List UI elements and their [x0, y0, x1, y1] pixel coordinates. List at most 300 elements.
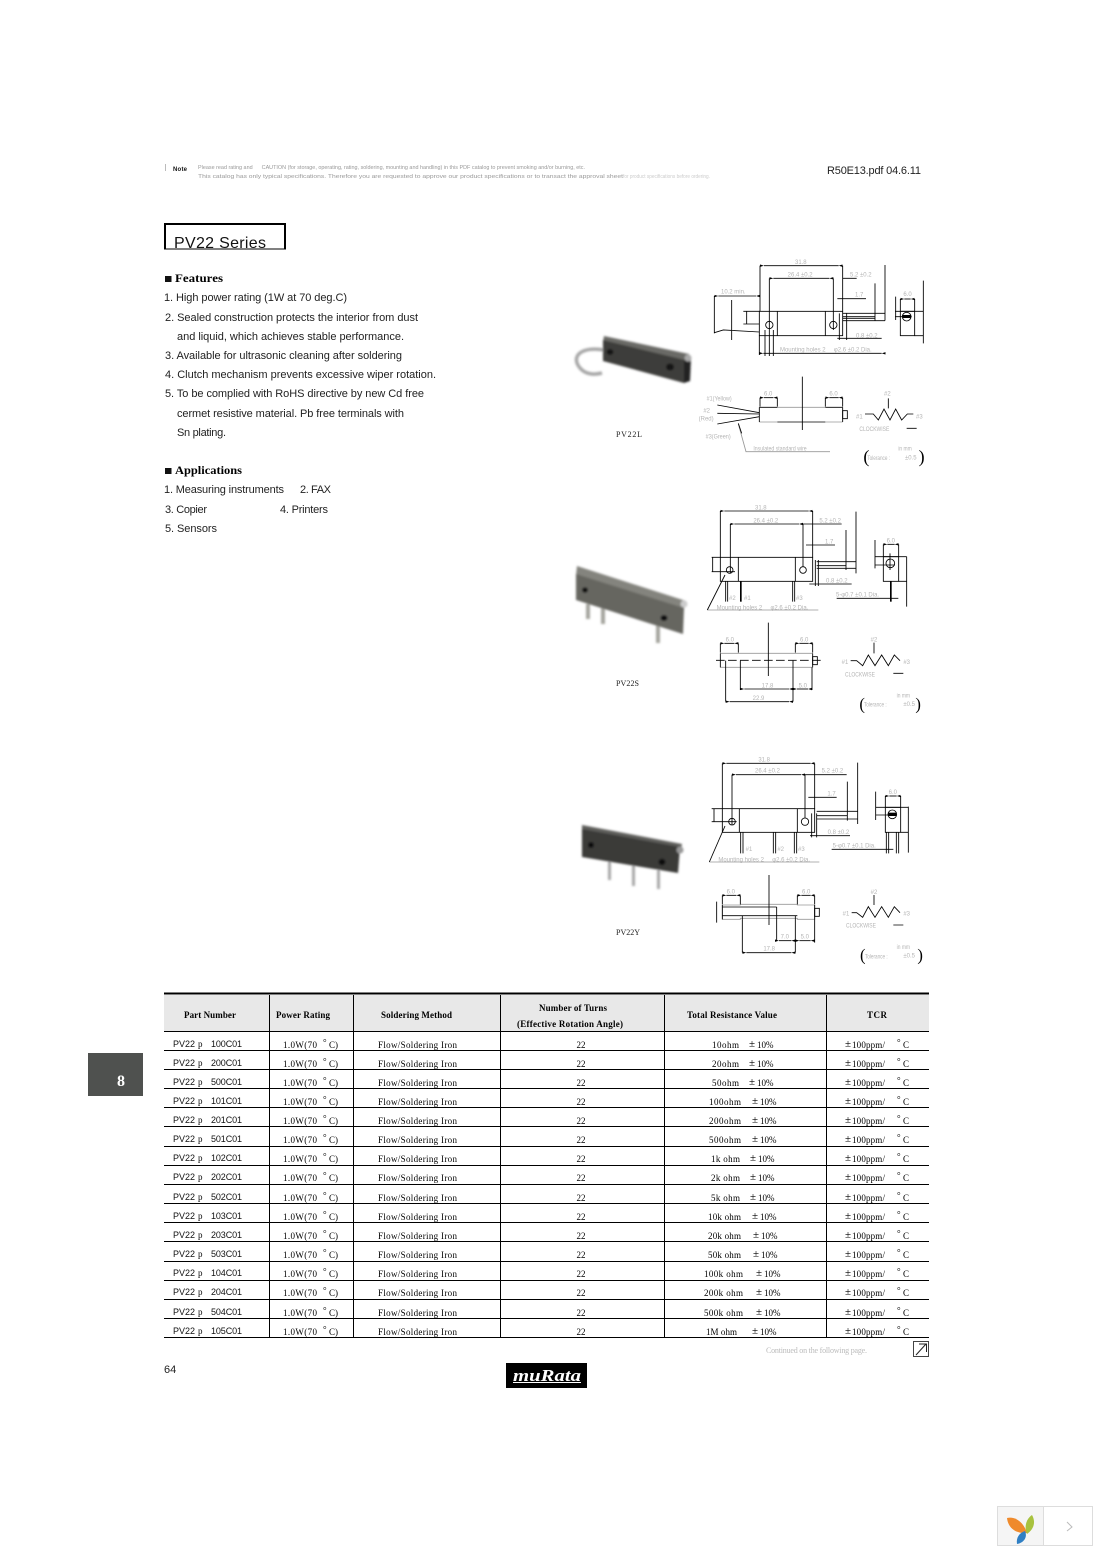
row 203C01: 20k ohm — [708, 1231, 741, 1241]
dimension drawing: PV22Y: CLOCKWISE — [846, 924, 876, 930]
dimension drawing: PV22S: 5.2 ±0.2 — [819, 519, 842, 525]
row 500C01: ± — [749, 1076, 755, 1088]
row 503C01: 503C01 — [211, 1249, 242, 1259]
row 100C01: 10% — [757, 1040, 774, 1050]
row 504C01: 500k ohm — [704, 1308, 743, 1318]
row 102C01: 22 — [576, 1154, 586, 1164]
row 103C01: ± — [752, 1210, 758, 1222]
row 100C01: 100C01 — [211, 1039, 242, 1049]
row 204C01 — [173, 1286, 909, 1298]
row 103C01: Flow/Soldering Iron — [378, 1212, 458, 1222]
row 105C01: Flow/Soldering Iron — [378, 1327, 458, 1337]
row 104C01: p — [198, 1268, 203, 1278]
row 105C01: 1M ohm — [706, 1327, 737, 1337]
dimension drawing: PV22L: in mm — [898, 447, 912, 453]
row 501C01: 10% — [760, 1135, 777, 1145]
applications list: Applications — [175, 463, 242, 477]
dimension drawing: PV22Y: 6.0 — [889, 790, 898, 796]
row 101C01 — [173, 1094, 909, 1107]
features list: Sn plating. — [177, 427, 226, 439]
row 503C01: PV22 — [173, 1249, 195, 1259]
row 502C01: 502C01 — [211, 1192, 242, 1202]
features list: 4. Clutch mechanism prevents excessive wiper rotation. — [165, 369, 436, 381]
row 202C01: 2k ohm — [711, 1173, 740, 1183]
row 501C01: ° — [323, 1132, 327, 1142]
row 203C01: 1.0W(70 — [283, 1231, 318, 1241]
dimension drawing: PV22Y: ) — [917, 946, 923, 965]
row 100C01: p — [198, 1039, 203, 1049]
row 503C01: C — [903, 1250, 909, 1260]
features list: 1. High power rating (1W at 70 deg.C) — [164, 292, 347, 304]
row 500C01: 500C01 — [211, 1077, 242, 1087]
features list: Features — [175, 271, 223, 285]
row 101C01: ° — [323, 1094, 327, 1104]
row 102C01: 1k ohm — [711, 1154, 740, 1164]
caption: PV22L: PV22L — [616, 430, 642, 439]
dimension drawing: PV22S: 1.7 — [825, 539, 834, 545]
row 204C01: C — [903, 1288, 909, 1298]
row 501C01: 22 — [576, 1135, 586, 1145]
dimension drawing: PV22Y — [709, 758, 923, 965]
row 201C01: Flow/Soldering Iron — [378, 1116, 458, 1126]
features list: and liquid, which achieves stable performance. — [177, 331, 404, 343]
dimension drawing: PV22S: 17.8 — [762, 683, 774, 689]
row 100C01: ± — [749, 1038, 755, 1050]
dimension drawing: PV22S: 31.8 — [755, 505, 767, 511]
row 203C01: ± — [753, 1229, 759, 1241]
applications list: 2. FAX — [300, 484, 332, 496]
row 101C01: Flow/Soldering Iron — [378, 1097, 458, 1107]
row 504C01: 100ppm/ — [852, 1308, 885, 1318]
row 202C01: ° — [323, 1170, 327, 1180]
dimension drawing: PV22L: Mounting holes 2 φ2.6 ±0.2 Dia. — [780, 348, 872, 354]
caption: PV22Y: PV22Y — [616, 928, 640, 937]
dimension drawing: PV22L: 31.8 — [795, 260, 807, 266]
row 504C01: ° — [897, 1306, 901, 1316]
applications list: 5. Sensors — [165, 523, 218, 535]
row 504C01: ± — [756, 1306, 762, 1318]
features list: 2. Sealed construction protects the interior from dust — [165, 312, 418, 324]
row 101C01: 1.0W(70 — [283, 1097, 318, 1107]
row 202C01: ± — [845, 1171, 851, 1183]
dimension drawing: PV22S: 22.9 — [753, 696, 765, 702]
dimension drawing: PV22L: 6.0 — [903, 292, 912, 298]
dimension drawing: PV22Y: #3 — [903, 911, 911, 917]
row 103C01: ° — [897, 1210, 901, 1220]
table header: TCR — [867, 1010, 888, 1020]
row 105C01: C) — [329, 1327, 338, 1337]
row 102C01: C — [903, 1154, 909, 1164]
row 203C01: C — [903, 1231, 909, 1241]
row 203C01: ° — [323, 1228, 327, 1238]
dimension drawing: PV22S: #2 — [871, 637, 878, 643]
row 105C01: ± — [845, 1325, 851, 1337]
row 102C01: p — [198, 1153, 203, 1163]
row 502C01: ° — [323, 1190, 327, 1200]
row 503C01: 10% — [761, 1250, 778, 1260]
row 200C01: C — [903, 1059, 909, 1069]
row 103C01: 22 — [576, 1212, 586, 1222]
section tab: 8: 8 — [117, 1073, 125, 1090]
row 105C01: 10% — [760, 1327, 777, 1337]
features list: 3. Available for ultrasonic cleaning after soldering — [165, 350, 402, 362]
dimension drawing: PV22L: ( — [863, 447, 869, 468]
dimension drawing: PV22Y: 0.8 ±0.2 — [828, 830, 850, 836]
row 103C01 — [173, 1210, 909, 1222]
row 504C01: ° — [323, 1306, 327, 1316]
row 503C01: ± — [753, 1248, 759, 1260]
dimension drawing: PV22Y: 26.4 ±0.2 — [755, 769, 781, 775]
logo: muRata: muRata — [513, 1366, 582, 1385]
row 501C01: 100ppm/ — [852, 1135, 885, 1145]
dimension drawing: PV22S: 6.0 — [726, 637, 735, 643]
dimension drawing: PV22S: #1 — [744, 596, 751, 602]
row 201C01: 10% — [760, 1116, 777, 1126]
row 204C01: 1.0W(70 — [283, 1288, 318, 1298]
row 504C01: 10% — [764, 1308, 781, 1318]
row 102C01: ± — [750, 1152, 756, 1164]
viewer widget — [998, 1506, 1092, 1546]
row 200C01: Flow/Soldering Iron — [378, 1059, 458, 1069]
note header: Please read rating and CAUTION (for storage, operating, rating, soldering, mounting and handling) in this PDF catalog to prevent smoking and/or burning, etc. — [198, 165, 585, 171]
row 101C01: 10% — [760, 1097, 777, 1107]
row 202C01: 22 — [576, 1173, 586, 1183]
row 105C01: C — [903, 1327, 909, 1337]
dimension drawing: PV22L: Insulated standard wire — [753, 446, 807, 452]
dimension drawing: PV22S: ( — [859, 694, 865, 713]
row 501C01: 1.0W(70 — [283, 1135, 318, 1145]
row 105C01: 1.0W(70 — [283, 1327, 318, 1337]
row 503C01: 50k ohm — [708, 1250, 741, 1260]
dimension drawing: PV22Y: Tolerance : — [865, 954, 888, 960]
row 100C01: ° — [897, 1038, 901, 1048]
row 503C01 — [173, 1248, 909, 1260]
row 105C01: 105C01 — [211, 1326, 242, 1336]
icon: continuation arrow — [914, 1342, 928, 1356]
row 200C01: C) — [329, 1059, 338, 1069]
dimension drawing: PV22L: #1(Yellow) — [707, 397, 732, 403]
dimension drawing: PV22Y: 6.0 — [802, 889, 811, 895]
applications list: 3. Copier — [165, 504, 207, 516]
row 503C01: ± — [845, 1248, 851, 1260]
dimension drawing: PV22S: 26.4 ±0.2 — [753, 519, 779, 525]
row 200C01: PV22 — [173, 1058, 195, 1068]
note header: Note — [173, 167, 188, 173]
row 103C01: p — [198, 1211, 203, 1221]
dimension drawing: PV22S: 0.8 ±0.2 — [826, 579, 848, 585]
row 502C01: 1.0W(70 — [283, 1193, 318, 1203]
row 104C01: 1.0W(70 — [283, 1269, 318, 1279]
row 200C01: 22 — [576, 1059, 586, 1069]
dimension drawing: PV22L: #2 — [703, 409, 711, 415]
table header: (Effective Rotation Angle) — [517, 1019, 623, 1029]
row 504C01: PV22 — [173, 1307, 195, 1317]
dimension drawing: PV22S: #2 — [729, 596, 736, 602]
row 503C01: 1.0W(70 — [283, 1250, 318, 1260]
product photo: PV22Y — [582, 825, 684, 889]
row 503C01: 100ppm/ — [852, 1250, 885, 1260]
row 204C01: Flow/Soldering Iron — [378, 1288, 458, 1298]
row 200C01: 100ppm/ — [852, 1059, 885, 1069]
row 103C01: PV22 — [173, 1211, 195, 1221]
row 100C01: 1.0W(70 — [283, 1040, 318, 1050]
dimension drawing: PV22Y: #2 — [871, 890, 878, 896]
applications list: 4. Printers — [280, 504, 328, 516]
row 104C01: ° — [323, 1266, 327, 1276]
icon: green leaf — [1026, 1515, 1034, 1534]
product photo: PV22L — [576, 336, 692, 383]
row 200C01: ± — [749, 1057, 755, 1069]
row 201C01: p — [198, 1115, 203, 1125]
dimension drawing: PV22S: CLOCKWISE — [845, 673, 875, 679]
row 503C01: p — [198, 1249, 203, 1259]
row 500C01: PV22 — [173, 1077, 195, 1087]
dimension drawing: PV22Y: ( — [860, 946, 866, 965]
row 103C01: ° — [323, 1210, 327, 1220]
row 104C01: 100ppm/ — [852, 1269, 885, 1279]
dimension drawing: PV22Y: #1 — [746, 847, 753, 853]
dimension drawing: PV22L: #3 — [916, 414, 923, 420]
dimension drawing: PV22L: CLOCKWISE — [859, 427, 889, 433]
row 100C01: 10ohm — [712, 1040, 739, 1050]
row 100C01: C — [903, 1040, 909, 1050]
row 102C01: 102C01 — [211, 1153, 242, 1163]
row 204C01: ± — [756, 1286, 762, 1298]
row 501C01: 500ohm — [709, 1135, 741, 1145]
dimension drawing: PV22Y: 7.0 — [781, 935, 790, 941]
dimension drawing: PV22S: Mounting holes 2 φ2.6 ±0.2 Dia. — [717, 605, 809, 611]
row 203C01: 100ppm/ — [852, 1231, 885, 1241]
row 504C01: C — [903, 1308, 909, 1318]
table: part numbers — [164, 992, 929, 1338]
row 500C01: 10% — [757, 1078, 774, 1088]
row 201C01 — [173, 1114, 909, 1126]
row 503C01: Flow/Soldering Iron — [378, 1250, 458, 1260]
row 501C01: p — [198, 1134, 203, 1144]
row 500C01: p — [198, 1077, 203, 1087]
row 103C01: 10% — [760, 1212, 777, 1222]
row 200C01: 20ohm — [712, 1059, 739, 1069]
dimension drawing: PV22S: #3 — [796, 596, 803, 602]
dimension drawing: PV22Y: Mounting holes 2 φ2.6 ±0.2 Dia. — [718, 857, 810, 863]
row 202C01: p — [198, 1172, 203, 1182]
row 204C01: ° — [897, 1286, 901, 1296]
row 200C01: p — [198, 1058, 203, 1068]
dimension drawing: PV22Y: ±0.5 — [903, 953, 916, 959]
row 203C01: 203C01 — [211, 1230, 242, 1240]
row 102C01: 10% — [758, 1154, 775, 1164]
row 104C01: ° — [897, 1266, 901, 1276]
row 103C01: C — [903, 1212, 909, 1222]
dimension drawing: PV22Y: 6.0 — [727, 889, 736, 895]
row 101C01: 100ohm — [709, 1097, 741, 1107]
dimension drawing: PV22Y: 31.8 — [758, 758, 771, 764]
table header: Power Rating — [276, 1010, 330, 1020]
table grid — [164, 995, 929, 1338]
row 500C01: ± — [845, 1076, 851, 1088]
features list: cermet resistive material. Pb free terminals with — [177, 408, 404, 420]
dimension drawing: PV22L: ) — [919, 447, 925, 468]
row 101C01: 22 — [576, 1097, 586, 1107]
row 502C01: 100ppm/ — [852, 1193, 885, 1203]
row 101C01: ± — [845, 1095, 851, 1107]
row 503C01: 22 — [576, 1250, 586, 1260]
row 105C01: ± — [752, 1325, 758, 1337]
row 102C01: C) — [329, 1154, 338, 1164]
row 501C01: PV22 — [173, 1134, 195, 1144]
row 204C01: 100ppm/ — [852, 1288, 885, 1298]
row 202C01: Flow/Soldering Iron — [378, 1173, 458, 1183]
row 101C01: ° — [897, 1094, 901, 1104]
row 501C01: ± — [845, 1133, 851, 1145]
row 105C01: 100ppm/ — [852, 1327, 885, 1337]
row 102C01: ° — [323, 1152, 327, 1162]
row 105C01 — [173, 1324, 909, 1337]
applications list — [164, 463, 332, 535]
row 100C01: PV22 — [173, 1039, 195, 1049]
row 103C01: ± — [845, 1210, 851, 1222]
row 200C01: 10% — [757, 1059, 774, 1069]
row 204C01: 10% — [764, 1288, 781, 1298]
dimension drawing: PV22L: 1.7 — [855, 293, 864, 299]
row 103C01: 10k ohm — [708, 1212, 741, 1222]
dimension drawing: PV22L: ±0.5 — [905, 455, 917, 461]
features list: 5. To be complied with RoHS directive by new Cd free — [165, 388, 424, 400]
row 204C01: PV22 — [173, 1287, 195, 1297]
row 201C01: C — [903, 1116, 909, 1126]
row 501C01: C — [903, 1135, 909, 1145]
row 105C01: ° — [897, 1324, 901, 1334]
row 500C01: ° — [897, 1076, 901, 1086]
dimension drawing: PV22L: 0.8 ±0.2 — [856, 333, 878, 339]
row 502C01: ± — [845, 1191, 851, 1203]
row 500C01 — [173, 1076, 909, 1088]
row 202C01: C) — [329, 1173, 338, 1183]
dimension drawing: PV22S: 6.0 — [800, 637, 809, 643]
row 101C01: ± — [752, 1095, 758, 1107]
row 500C01: C) — [329, 1078, 338, 1088]
row 203C01 — [173, 1228, 909, 1241]
table header: Number of Turns — [539, 1003, 607, 1013]
row 202C01: ° — [897, 1170, 901, 1180]
row 203C01: Flow/Soldering Iron — [378, 1231, 458, 1241]
row 105C01: ° — [323, 1324, 327, 1334]
row 502C01: 10% — [758, 1193, 775, 1203]
table header: Soldering Method — [381, 1010, 452, 1020]
row 101C01: 101C01 — [211, 1096, 242, 1106]
row 200C01: 200C01 — [211, 1058, 242, 1068]
row 502C01: C) — [329, 1193, 338, 1203]
row 204C01: ° — [323, 1286, 327, 1296]
note header — [165, 164, 710, 180]
row 502C01: C — [903, 1193, 909, 1203]
row 101C01: 100ppm/ — [852, 1097, 885, 1107]
section tab: 8 — [88, 1053, 143, 1096]
row 501C01: 501C01 — [211, 1134, 242, 1144]
dimension drawing: PV22L — [699, 260, 925, 468]
row 100C01 — [173, 1038, 909, 1050]
row 202C01: 1.0W(70 — [283, 1173, 318, 1183]
row 200C01 — [173, 1056, 909, 1069]
dimension drawing: PV22Y: 5.0 — [801, 935, 810, 941]
dimension drawing: PV22L: #1 — [856, 414, 863, 420]
row 502C01: 5k ohm — [711, 1193, 740, 1203]
dimension drawing: PV22L: #3(Green) — [706, 434, 731, 440]
row 104C01: ± — [845, 1267, 851, 1279]
row 100C01: ° — [323, 1038, 327, 1048]
dimension drawing: PV22L: 26.4 ±0.2 — [788, 273, 813, 279]
row 202C01: 10% — [758, 1173, 775, 1183]
row 503C01: C) — [329, 1250, 338, 1260]
row 104C01: C) — [329, 1269, 338, 1279]
applications list: 1. Measuring instruments — [164, 484, 284, 496]
icon: chevron — [1067, 1522, 1072, 1531]
row 105C01: 22 — [576, 1327, 586, 1337]
dimension drawing: PV22Y: 5.2 ±0.2 — [822, 769, 844, 775]
row 500C01: 100ppm/ — [852, 1078, 885, 1088]
dimension drawing: PV22L: 6.0 — [764, 391, 773, 397]
row 203C01: 22 — [576, 1231, 586, 1241]
row 204C01: C) — [329, 1288, 338, 1298]
note header: This catalog has only typical specifications. Therefore you are requested to approve our product specifications or to transact the approval sheet — [198, 174, 624, 180]
row 200C01: ° — [323, 1056, 327, 1066]
row 101C01: C — [903, 1097, 909, 1107]
row 100C01: Flow/Soldering Iron — [378, 1040, 458, 1050]
row 104C01: 10% — [764, 1269, 781, 1279]
row 104C01 — [173, 1266, 909, 1279]
row 102C01 — [173, 1152, 909, 1164]
logo: muRata — [506, 1363, 587, 1388]
dimension drawing: PV22L: 10.2 min. — [721, 289, 746, 295]
dimension drawing: PV22L: (Red) — [699, 417, 714, 423]
row 203C01: 10% — [761, 1231, 778, 1241]
row 501C01 — [173, 1132, 909, 1145]
note header: for product specifications before ordering. — [623, 174, 710, 180]
dimension drawing: PV22Y: #1 — [843, 911, 850, 917]
icon: blue leaf — [1017, 1531, 1026, 1544]
row 500C01: Flow/Soldering Iron — [378, 1078, 458, 1088]
dimension drawing: PV22S: in mm — [897, 693, 910, 699]
row 502C01: p — [198, 1192, 203, 1202]
row 102C01: Flow/Soldering Iron — [378, 1154, 458, 1164]
row 102C01: 1.0W(70 — [283, 1154, 318, 1164]
dimension drawing: PV22L: Tolerance : — [867, 456, 890, 462]
row 104C01: Flow/Soldering Iron — [378, 1269, 458, 1279]
dimension drawing: PV22Y: #2 — [777, 847, 785, 853]
dimension drawing: PV22S: ±0.5 — [903, 702, 916, 708]
row 500C01: ° — [323, 1076, 327, 1086]
row 200C01: ± — [845, 1057, 851, 1069]
row 101C01: C) — [329, 1097, 338, 1107]
icon: orange leaf — [1007, 1518, 1027, 1533]
row 504C01: ± — [845, 1306, 851, 1318]
row 500C01: 1.0W(70 — [283, 1078, 318, 1088]
row 101C01: p — [198, 1096, 203, 1106]
row 105C01: PV22 — [173, 1326, 195, 1336]
row 202C01: C — [903, 1173, 909, 1183]
row 105C01: p — [198, 1326, 203, 1336]
row 501C01: C) — [329, 1135, 338, 1145]
row 204C01: ± — [845, 1286, 851, 1298]
dimension drawing: PV22L: 6.0 — [829, 391, 838, 397]
dimension drawing: PV22S: #3 — [903, 660, 911, 666]
row 203C01: ° — [897, 1228, 901, 1238]
row 204C01: p — [198, 1287, 203, 1297]
row 501C01: Flow/Soldering Iron — [378, 1135, 458, 1145]
row 201C01: 1.0W(70 — [283, 1116, 318, 1126]
row 504C01: C) — [329, 1308, 338, 1318]
row 202C01: ± — [750, 1171, 756, 1183]
